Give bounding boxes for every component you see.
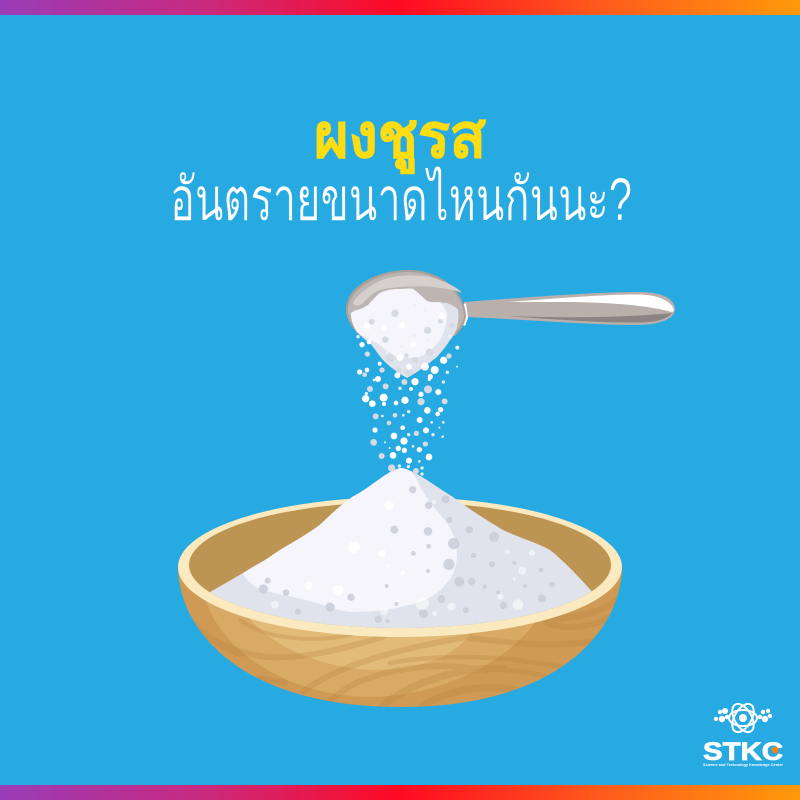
top gradient bar (0, 0, 800, 15)
salt in spoon (351, 289, 458, 378)
salt shadow side (205, 468, 595, 640)
bowl body (178, 567, 622, 708)
logo tagline: Science and Technology Knowledge Center (703, 762, 783, 767)
salt light side (243, 468, 457, 612)
salt speckles (259, 486, 555, 623)
heading: MSG: ผงชูรส (314, 102, 487, 174)
bottom gradient bar (0, 785, 800, 800)
wooden bowl with salt pile (178, 468, 622, 708)
logo atom icon (714, 700, 772, 736)
logo orange dot (772, 746, 778, 754)
falling salt particles (356, 303, 459, 476)
spoon (346, 270, 675, 336)
white grains (357, 313, 447, 464)
bowl rim (178, 497, 622, 637)
salt pile (205, 468, 595, 640)
tiny sparkles (356, 303, 459, 476)
logo wordmark: STKC (703, 738, 783, 766)
bowl interior (189, 502, 611, 628)
title (170, 102, 632, 233)
spoon bowl (346, 270, 468, 336)
grey grains (362, 310, 455, 474)
spoon handle (464, 292, 675, 325)
STKC logo (703, 700, 783, 767)
